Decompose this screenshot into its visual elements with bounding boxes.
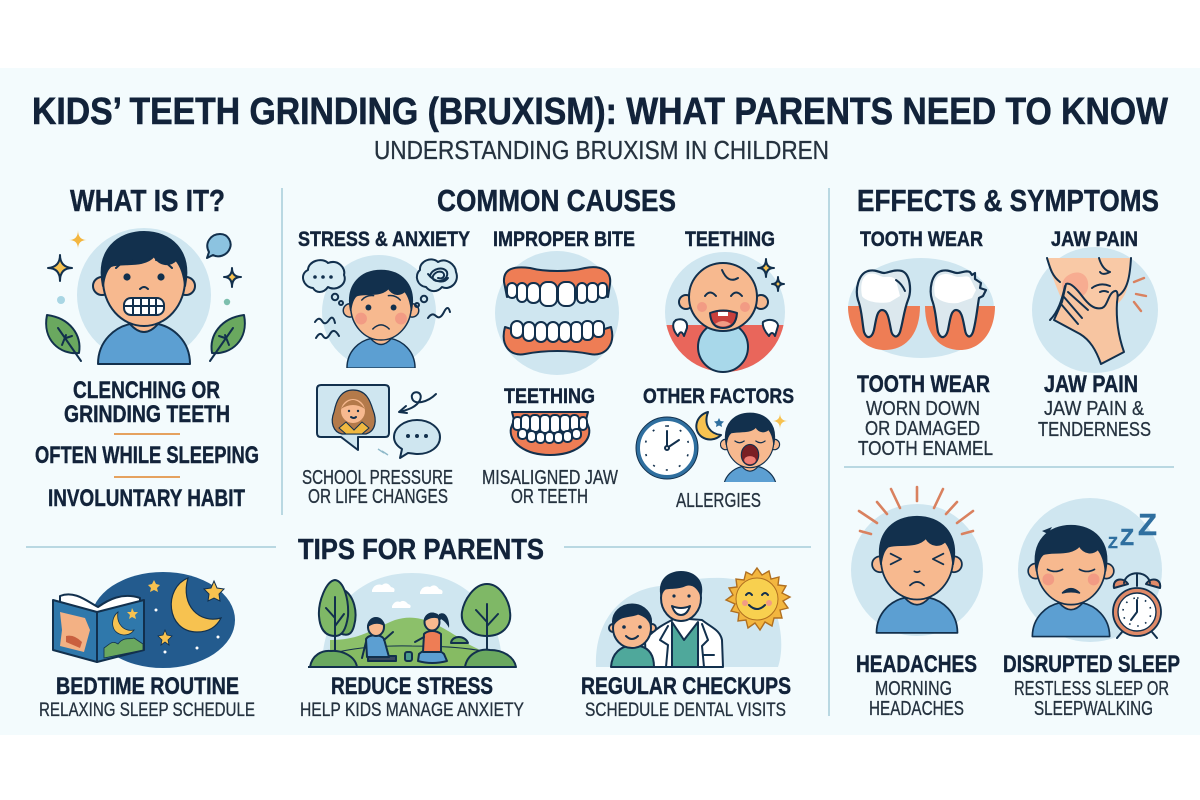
text: tooth wear description: WORN DOWN [866, 398, 980, 420]
text: disrupted sleep description: SLEEPWALKING [1034, 698, 1153, 720]
icon: jaw pain [1032, 247, 1158, 373]
panel: common causes [298, 183, 794, 512]
text: definition: OFTEN WHILE SLEEPING [35, 442, 259, 469]
text: definition [35, 377, 259, 512]
icon: bedtime book and moon [53, 572, 235, 668]
label: regular checkups: REGULAR CHECKUPS [581, 673, 791, 700]
text: allergies: ALLERGIES [676, 490, 761, 512]
text: relaxing sleep schedule: RELAXING SLEEP SCHEDULE [39, 700, 255, 721]
text: tooth wear description: TOOTH ENAMEL [858, 438, 993, 460]
label: teething: TEETHING [685, 228, 775, 251]
text: headaches description [856, 651, 977, 720]
subtitle: UNDERSTANDING BRUXISM IN CHILDREN [374, 135, 829, 165]
text: help kids manage anxiety: HELP KIDS MANAGE ANXIETY [300, 700, 524, 721]
text: jaw pain description [1038, 371, 1151, 441]
text: headaches description: HEADACHES [869, 698, 964, 720]
text: jaw pain description: JAW PAIN & [1044, 398, 1145, 420]
icon: disrupted sleep boy and alarm clock: Z [1108, 535, 1118, 552]
panel: effects and symptoms [848, 183, 1180, 720]
icon: disrupted sleep boy and alarm clock [1018, 498, 1162, 642]
icon: teething baby [665, 252, 785, 373]
text: misaligned jaw: OR TEETH [511, 486, 588, 508]
label: stress and anxiety: STRESS & ANXIETY [298, 228, 470, 251]
text: headaches description: HEADACHES [856, 651, 977, 678]
icon: stressed boy [303, 255, 457, 369]
label: bedtime routine: BEDTIME ROUTINE [56, 673, 239, 700]
icon: disrupted sleep boy and alarm clock: Z [1138, 507, 1157, 542]
label: teething second: TEETHING [504, 385, 595, 408]
text: jaw pain description: TENDERNESS [1038, 419, 1151, 441]
icon: doctor, child and sun [596, 568, 790, 667]
label: tooth wear: TOOTH WEAR [860, 228, 983, 251]
heading: common causes: COMMON CAUSES [437, 183, 676, 218]
icon: worn teeth [848, 258, 995, 358]
heading: tips for parents: TIPS FOR PARENTS [298, 534, 544, 566]
icon: clock, moon and yawning boy [636, 412, 788, 490]
text: tooth wear description [857, 371, 993, 460]
icon: kids playing in the park [308, 573, 516, 667]
heading: what is it: WHAT IS IT? [70, 183, 225, 218]
text: schedule dental visits: SCHEDULE DENTAL VISITS [585, 700, 786, 721]
text: school pressure: SCHOOL PRESSURE [302, 467, 453, 489]
text: definition: INVOLUNTARY HABIT [48, 485, 245, 512]
label: improper bite: IMPROPER BITE [493, 228, 635, 251]
text: jaw pain description: JAW PAIN [1044, 371, 1138, 398]
text: tooth wear description: TOOTH WEAR [857, 371, 990, 398]
text: headaches description: MORNING [875, 678, 952, 700]
text: misaligned jaw [482, 467, 618, 508]
text: school pressure [302, 467, 453, 508]
label: reduce stress: REDUCE STRESS [331, 673, 493, 700]
text: school pressure: OR LIFE CHANGES [308, 486, 448, 508]
icon: school pressure chat [317, 385, 440, 458]
panel: tips for parents [39, 534, 791, 721]
icon: disrupted sleep boy and alarm clock: Z [1120, 524, 1134, 550]
text: tooth wear description: OR DAMAGED [865, 418, 980, 440]
icon: headache boy [851, 487, 983, 636]
text: definition: CLENCHING OR [73, 377, 220, 404]
panel: what is it [35, 183, 259, 512]
text: definition: GRINDING TEETH [64, 401, 230, 428]
text: misaligned jaw: MISALIGNED JAW [482, 467, 618, 489]
icon: boy clenching teeth [46, 228, 245, 364]
label: other factors: OTHER FACTORS [643, 385, 794, 408]
label: jaw pain: JAW PAIN [1051, 228, 1138, 251]
icon: misaligned teeth [511, 412, 589, 455]
icon: improper bite teeth [495, 251, 619, 375]
text: disrupted sleep description [1003, 651, 1180, 720]
